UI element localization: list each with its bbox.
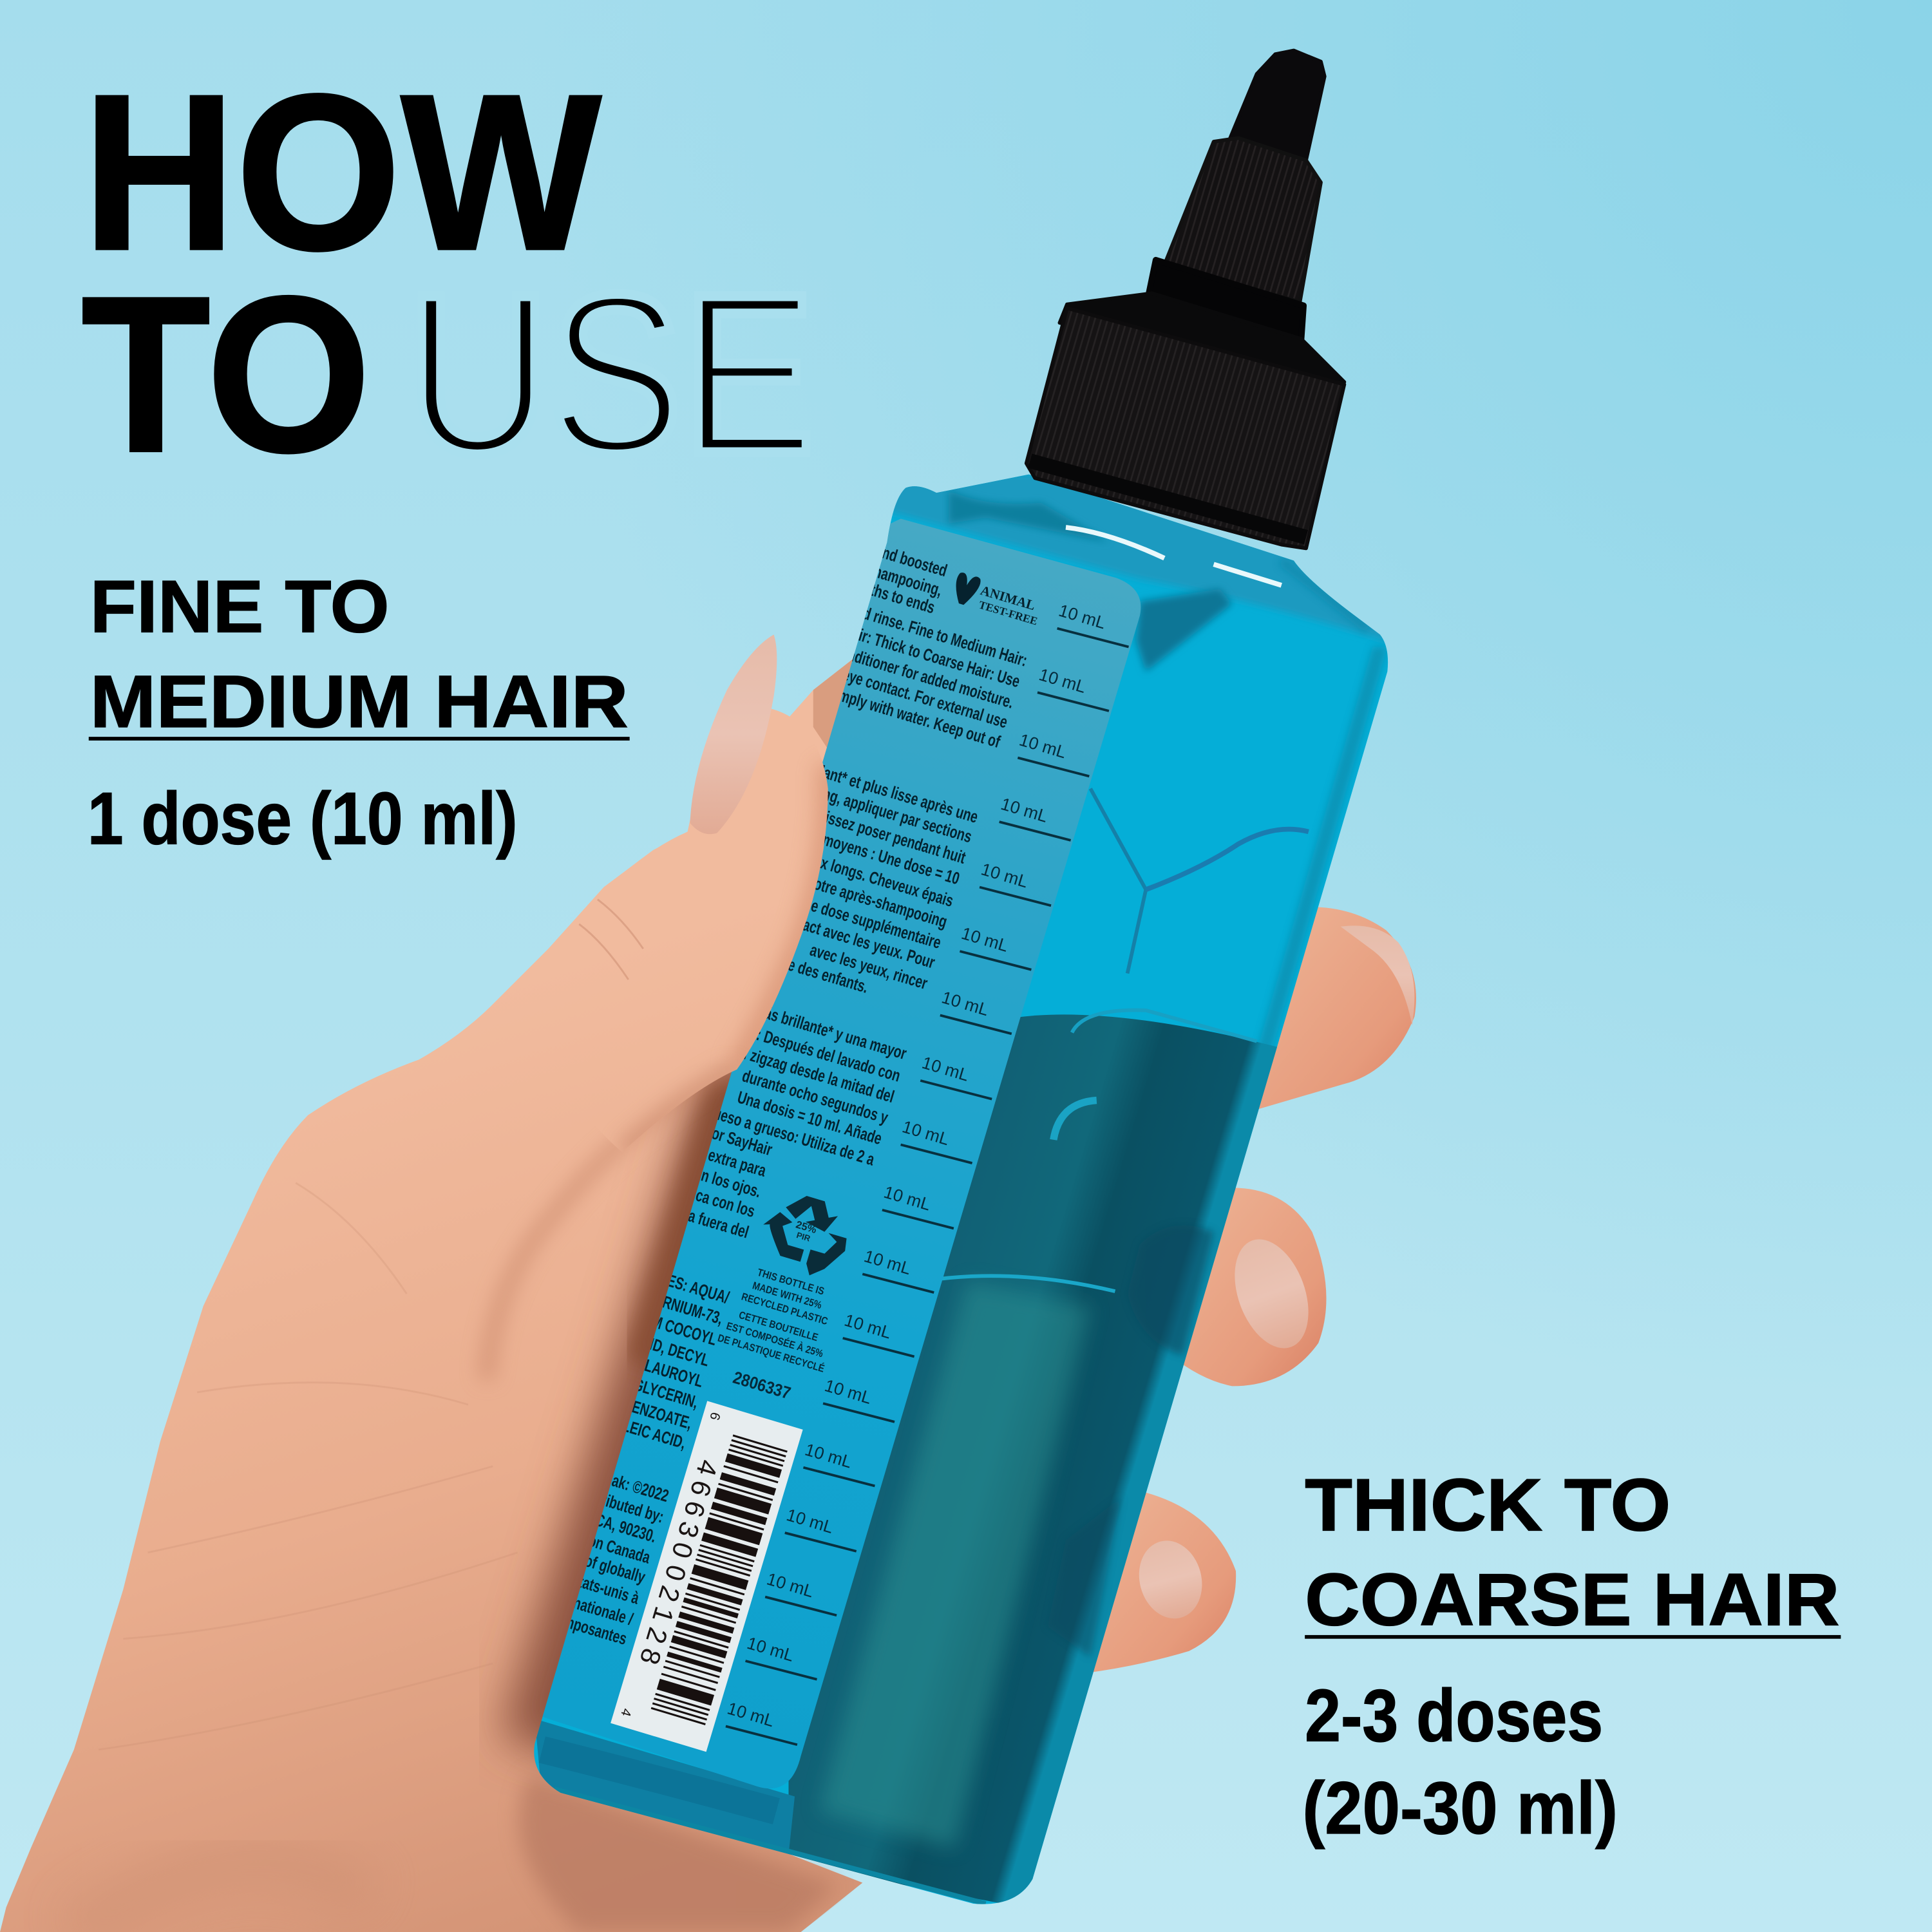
directions text: French: ing, appliquer par sections — [817, 783, 974, 846]
directions text: Spanish: más brillante* y una mayor — [752, 1000, 909, 1063]
ingredients text: Revlon Canada — [561, 1523, 653, 1567]
recycling statement: EST COMPOSÉE À 25% — [725, 1320, 825, 1360]
ingredients text: evlak: ©2022 — [593, 1466, 671, 1506]
ingredients text — [530, 1264, 732, 1649]
measure marks: 10 mL: 10 mL — [882, 1182, 933, 1215]
text block: thick to coarse hair: COARSE HAIR — [1305, 1559, 1840, 1642]
measure marks: 10 mL: 10 mL — [1057, 601, 1108, 633]
directions text: English: air: Thick to Coarse Hair: Use — [850, 623, 1022, 691]
cap ribbed nozzle — [1164, 138, 1321, 302]
cap tip — [1229, 50, 1325, 160]
barcode: 6 — [706, 1410, 723, 1422]
title: TO — [81, 250, 371, 498]
directions text: Spanish: ueso a grueso: Utiliza de 2 a — [711, 1103, 877, 1170]
ingredients text: internationale / — [545, 1586, 636, 1629]
ingredients text: ENTES: AQUA/ — [641, 1264, 732, 1307]
recycling statement: MADE WITH 25% — [751, 1280, 823, 1312]
measure marks: 10 mL: 10 mL — [745, 1633, 796, 1665]
directions text: French: avec les yeux, rincer — [808, 940, 930, 993]
ingredients text: EPOLYGLYCERIN, — [592, 1363, 701, 1412]
directions text: French: tée des enfants. — [775, 952, 871, 997]
bottle — [534, 474, 1388, 1904]
text block: thick to coarse hair: THICK TO — [1305, 1464, 1671, 1546]
measure marks: 10 mL: 10 mL — [979, 859, 1030, 891]
cap cone — [1059, 293, 1344, 394]
recycling statement — [716, 1267, 829, 1375]
directions text: English: d rinse. Fine to Medium Hair: — [861, 603, 1030, 670]
recycling statement: THIS BOTTLE IS — [756, 1267, 826, 1298]
directions text: French: lant* et plus lisse après une — [818, 762, 980, 827]
text block: fine to medium hair — [88, 566, 630, 860]
directions text: French: ntact avec les yeux. Pour — [790, 911, 937, 972]
base shadow — [535, 1719, 795, 1854]
directions text: French: ux longs. Cheveux épais — [811, 851, 956, 911]
text block: thick to coarse hair: 2-3 doses — [1305, 1674, 1603, 1757]
directions text: French: Laissez poser pendant huit — [809, 804, 968, 867]
recycling statement: RECYCLED PLASTIC — [740, 1291, 829, 1328]
Y line on the back of the bottle — [1090, 788, 1146, 973]
measure marks: 10 mL: 10 mL — [802, 1440, 854, 1472]
text block: thick to coarse hair — [1302, 1464, 1841, 1850]
upper reflection triangle — [1136, 589, 1232, 672]
ingredients text: aux états-unis à — [546, 1563, 642, 1608]
ingredients text: IUM COCOYL — [638, 1308, 719, 1349]
hand: back fingers — [1084, 907, 1416, 1673]
text block: fine to medium hair: 1 dose (10 ml) — [88, 778, 518, 860]
ingredients text: IC ACID, DECYL — [616, 1325, 712, 1370]
ingredients text: M BENZOATE, — [608, 1390, 694, 1433]
directions text: Spanish: n los ojos. — [699, 1166, 763, 1201]
directions text: French — [775, 762, 980, 997]
thumbnail — [690, 634, 777, 834]
barcode: 4 — [618, 1707, 634, 1718]
measure marks: 10 mL: 10 mL — [900, 1117, 951, 1149]
lot code: 2806337 — [731, 1368, 793, 1403]
icon: recycling symbol — [753, 1186, 857, 1283]
barcode: 02128 — [634, 1562, 692, 1668]
directions text: English: mply with water. Keep out of — [837, 685, 1003, 752]
finger: top — [1251, 907, 1416, 1112]
hand: palm — [0, 659, 862, 1932]
directions text: French: ne dose supplémentaire — [802, 893, 943, 952]
barcode — [611, 1401, 803, 1752]
directions text: English: and boosted — [873, 541, 949, 580]
barcode: 46630 — [666, 1456, 724, 1562]
liquid dark lower section — [788, 1014, 1279, 1910]
directions text: English: eye contact. For external use — [840, 665, 1010, 732]
ingredients text: ty, CA, 90230. — [576, 1505, 659, 1546]
text block: thick to coarse hair: (20-30 ml) — [1302, 1767, 1618, 1850]
finger: middle — [1171, 1188, 1326, 1386]
ingredients text: ux composantes — [530, 1602, 629, 1649]
shoulder highlights — [949, 490, 1109, 542]
measure marks: 10 mL: 10 mL — [862, 1246, 913, 1278]
directions text: Spanish: ca con los — [694, 1185, 757, 1221]
directions text: Spanish: extra para — [706, 1145, 769, 1180]
measure marks: 10 mL: 10 mL — [940, 987, 991, 1019]
directions text: English — [837, 541, 1030, 752]
title: USE — [406, 247, 815, 500]
ingredients text: 100% of globally — [549, 1541, 648, 1587]
hand: thumb — [530, 634, 829, 1152]
bottle cap — [1027, 50, 1344, 548]
measure marks: 10 mL: 10 mL — [920, 1053, 971, 1085]
ingredients text: ributed by: — [599, 1490, 666, 1526]
directions text: French: votre après-shampooing — [805, 872, 949, 931]
measure marks: 10 mL: 10 mL — [1017, 730, 1068, 762]
directions text: Spanish: ones: Después del lavado con — [726, 1016, 903, 1085]
measure marks: 10 mL: 10 mL — [822, 1376, 874, 1408]
measure marks: 10 mL: 10 mL — [842, 1311, 894, 1343]
icon: recycling symbol: 25% — [795, 1219, 818, 1236]
cap knurled base — [1027, 308, 1344, 548]
measure marks: 10 mL: 10 mL — [999, 794, 1050, 826]
directions text: Spanish: en zigzag desde la mitad del — [731, 1041, 896, 1106]
text block: fine to medium hair: FINE TO — [90, 566, 390, 649]
shoulder — [887, 475, 1405, 647]
measure marks: 10 mL: 10 mL — [784, 1505, 836, 1537]
measure marks: 10 mL: 10 mL — [764, 1569, 816, 1601]
ingredients text: IUM LAUROYL — [618, 1348, 705, 1391]
finger: lower — [1084, 1491, 1236, 1673]
directions text: French: moyens : Une dose = 10 — [820, 829, 961, 888]
directions text: English: nditioner for added moisture. — [845, 645, 1016, 712]
directions text: Spanish: Una dosis = 10 ml. Añade — [735, 1087, 884, 1148]
directions text: Spanish: or SayHair — [710, 1123, 775, 1159]
directions text: Spanish: durante ocho segundos y — [740, 1066, 891, 1127]
icon: animal test-free heart: TEST-FREE — [978, 599, 1039, 627]
bottle body — [534, 474, 1388, 1904]
back label — [493, 493, 1183, 1811]
text block: fine to medium hair: MEDIUM HAIR — [90, 661, 629, 743]
ingredients text: ATERNIUM-73, — [638, 1285, 725, 1328]
cap collar — [1148, 260, 1303, 341]
recycling statement: CETTE BOUTEILLE — [737, 1309, 819, 1344]
directions text: English: gths to ends — [861, 578, 937, 617]
recycling statement: DE PLASTIQUE RECYCLÉ — [716, 1332, 826, 1375]
icon: animal test-free heart — [950, 571, 1045, 627]
measure marks: 10 mL: 10 mL — [725, 1698, 777, 1730]
measure marks: 10 mL — [725, 601, 1129, 1745]
right rim — [1018, 647, 1387, 1885]
directions text: Spanish — [679, 1000, 909, 1242]
measure marks: 10 mL: 10 mL — [959, 923, 1010, 956]
directions text: Spanish: ga fuera del — [679, 1204, 751, 1242]
directions text: English: r shampooing, — [857, 557, 945, 600]
icon: recycling symbol: PIR — [795, 1230, 812, 1244]
icon: animal test-free heart: ANIMAL — [979, 582, 1037, 613]
reflected fingers — [1151, 1225, 1216, 1358]
title: HOW — [82, 48, 603, 296]
ingredients text: INOLEIC ACID, — [600, 1409, 688, 1453]
measure marks: 10 mL: 10 mL — [1037, 665, 1088, 697]
title — [81, 48, 815, 500]
